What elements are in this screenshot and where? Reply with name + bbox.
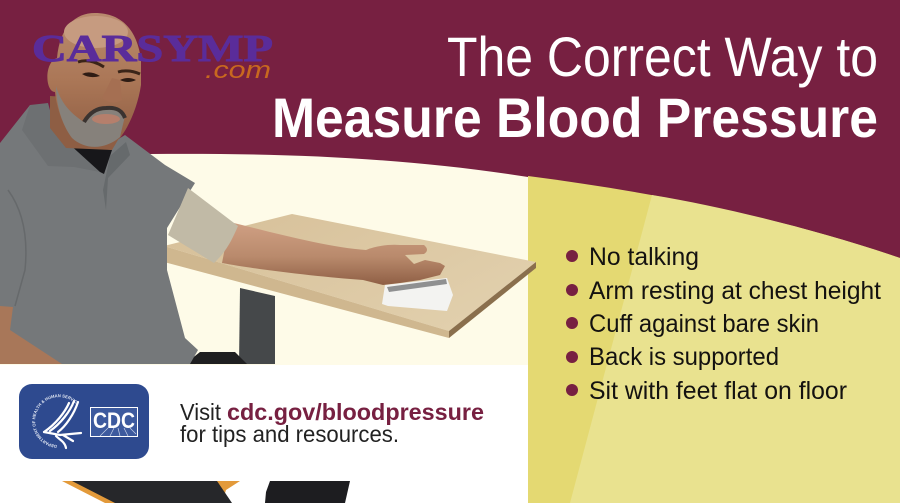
- shirt body: [0, 105, 198, 364]
- item: no talking: No talking: [589, 243, 699, 271]
- CDC letters: CDC: [93, 408, 135, 433]
- HHS seal text: DEPARTMENT OF HEALTH & HUMAN SERVICES USA: [32, 394, 78, 448]
- CDC box: [90, 408, 138, 436]
- neck: [50, 96, 125, 150]
- watermark: CARSYMP.com: [32, 28, 273, 84]
- item: back: Back is supported: [589, 343, 779, 371]
- watermark: CARSYMP.com: .com: [205, 57, 271, 84]
- logo badge: [19, 384, 149, 459]
- trousers: [185, 352, 247, 364]
- undershirt: [62, 144, 112, 174]
- table with leg: [164, 214, 536, 364]
- eyes: [82, 72, 136, 82]
- monitor display: [387, 279, 447, 292]
- skin at lower left: [0, 306, 62, 364]
- chair and legs at bottom: [62, 481, 350, 503]
- forearm and hand: [222, 222, 445, 285]
- visit text: Visit: [180, 399, 221, 425]
- cream panel: [0, 154, 528, 365]
- checklist: [566, 243, 881, 405]
- light yellow wedge: [570, 195, 900, 503]
- white footer: [0, 365, 528, 503]
- brows: [78, 61, 140, 74]
- item: cuff: Cuff against bare skin: [589, 310, 819, 338]
- collar: [22, 103, 100, 172]
- moustache: [84, 108, 125, 122]
- beard: [56, 86, 125, 147]
- sleeve fold: [8, 190, 26, 306]
- visit text: cdc.gov/bloodpressure: [227, 399, 484, 425]
- monitor: [382, 278, 453, 311]
- placket: [103, 142, 130, 210]
- lips: [92, 114, 120, 124]
- eagle: [44, 401, 81, 448]
- visit text: [180, 399, 484, 447]
- head: [47, 13, 141, 147]
- item: arm resting: Arm resting at chest height: [589, 277, 881, 305]
- scalp highlight: [64, 16, 128, 48]
- yellow panel: [528, 176, 900, 503]
- photo: seated man: [0, 13, 453, 364]
- cuff: [168, 188, 238, 263]
- nose: [102, 78, 122, 103]
- watermark: CARSYMP.com: CARSYMP: [32, 28, 273, 70]
- title: [272, 25, 878, 149]
- CDC box rays: [100, 428, 136, 436]
- visit text: for tips and resources.: [180, 421, 399, 447]
- item: feet: Sit with feet flat on floor: [589, 377, 847, 405]
